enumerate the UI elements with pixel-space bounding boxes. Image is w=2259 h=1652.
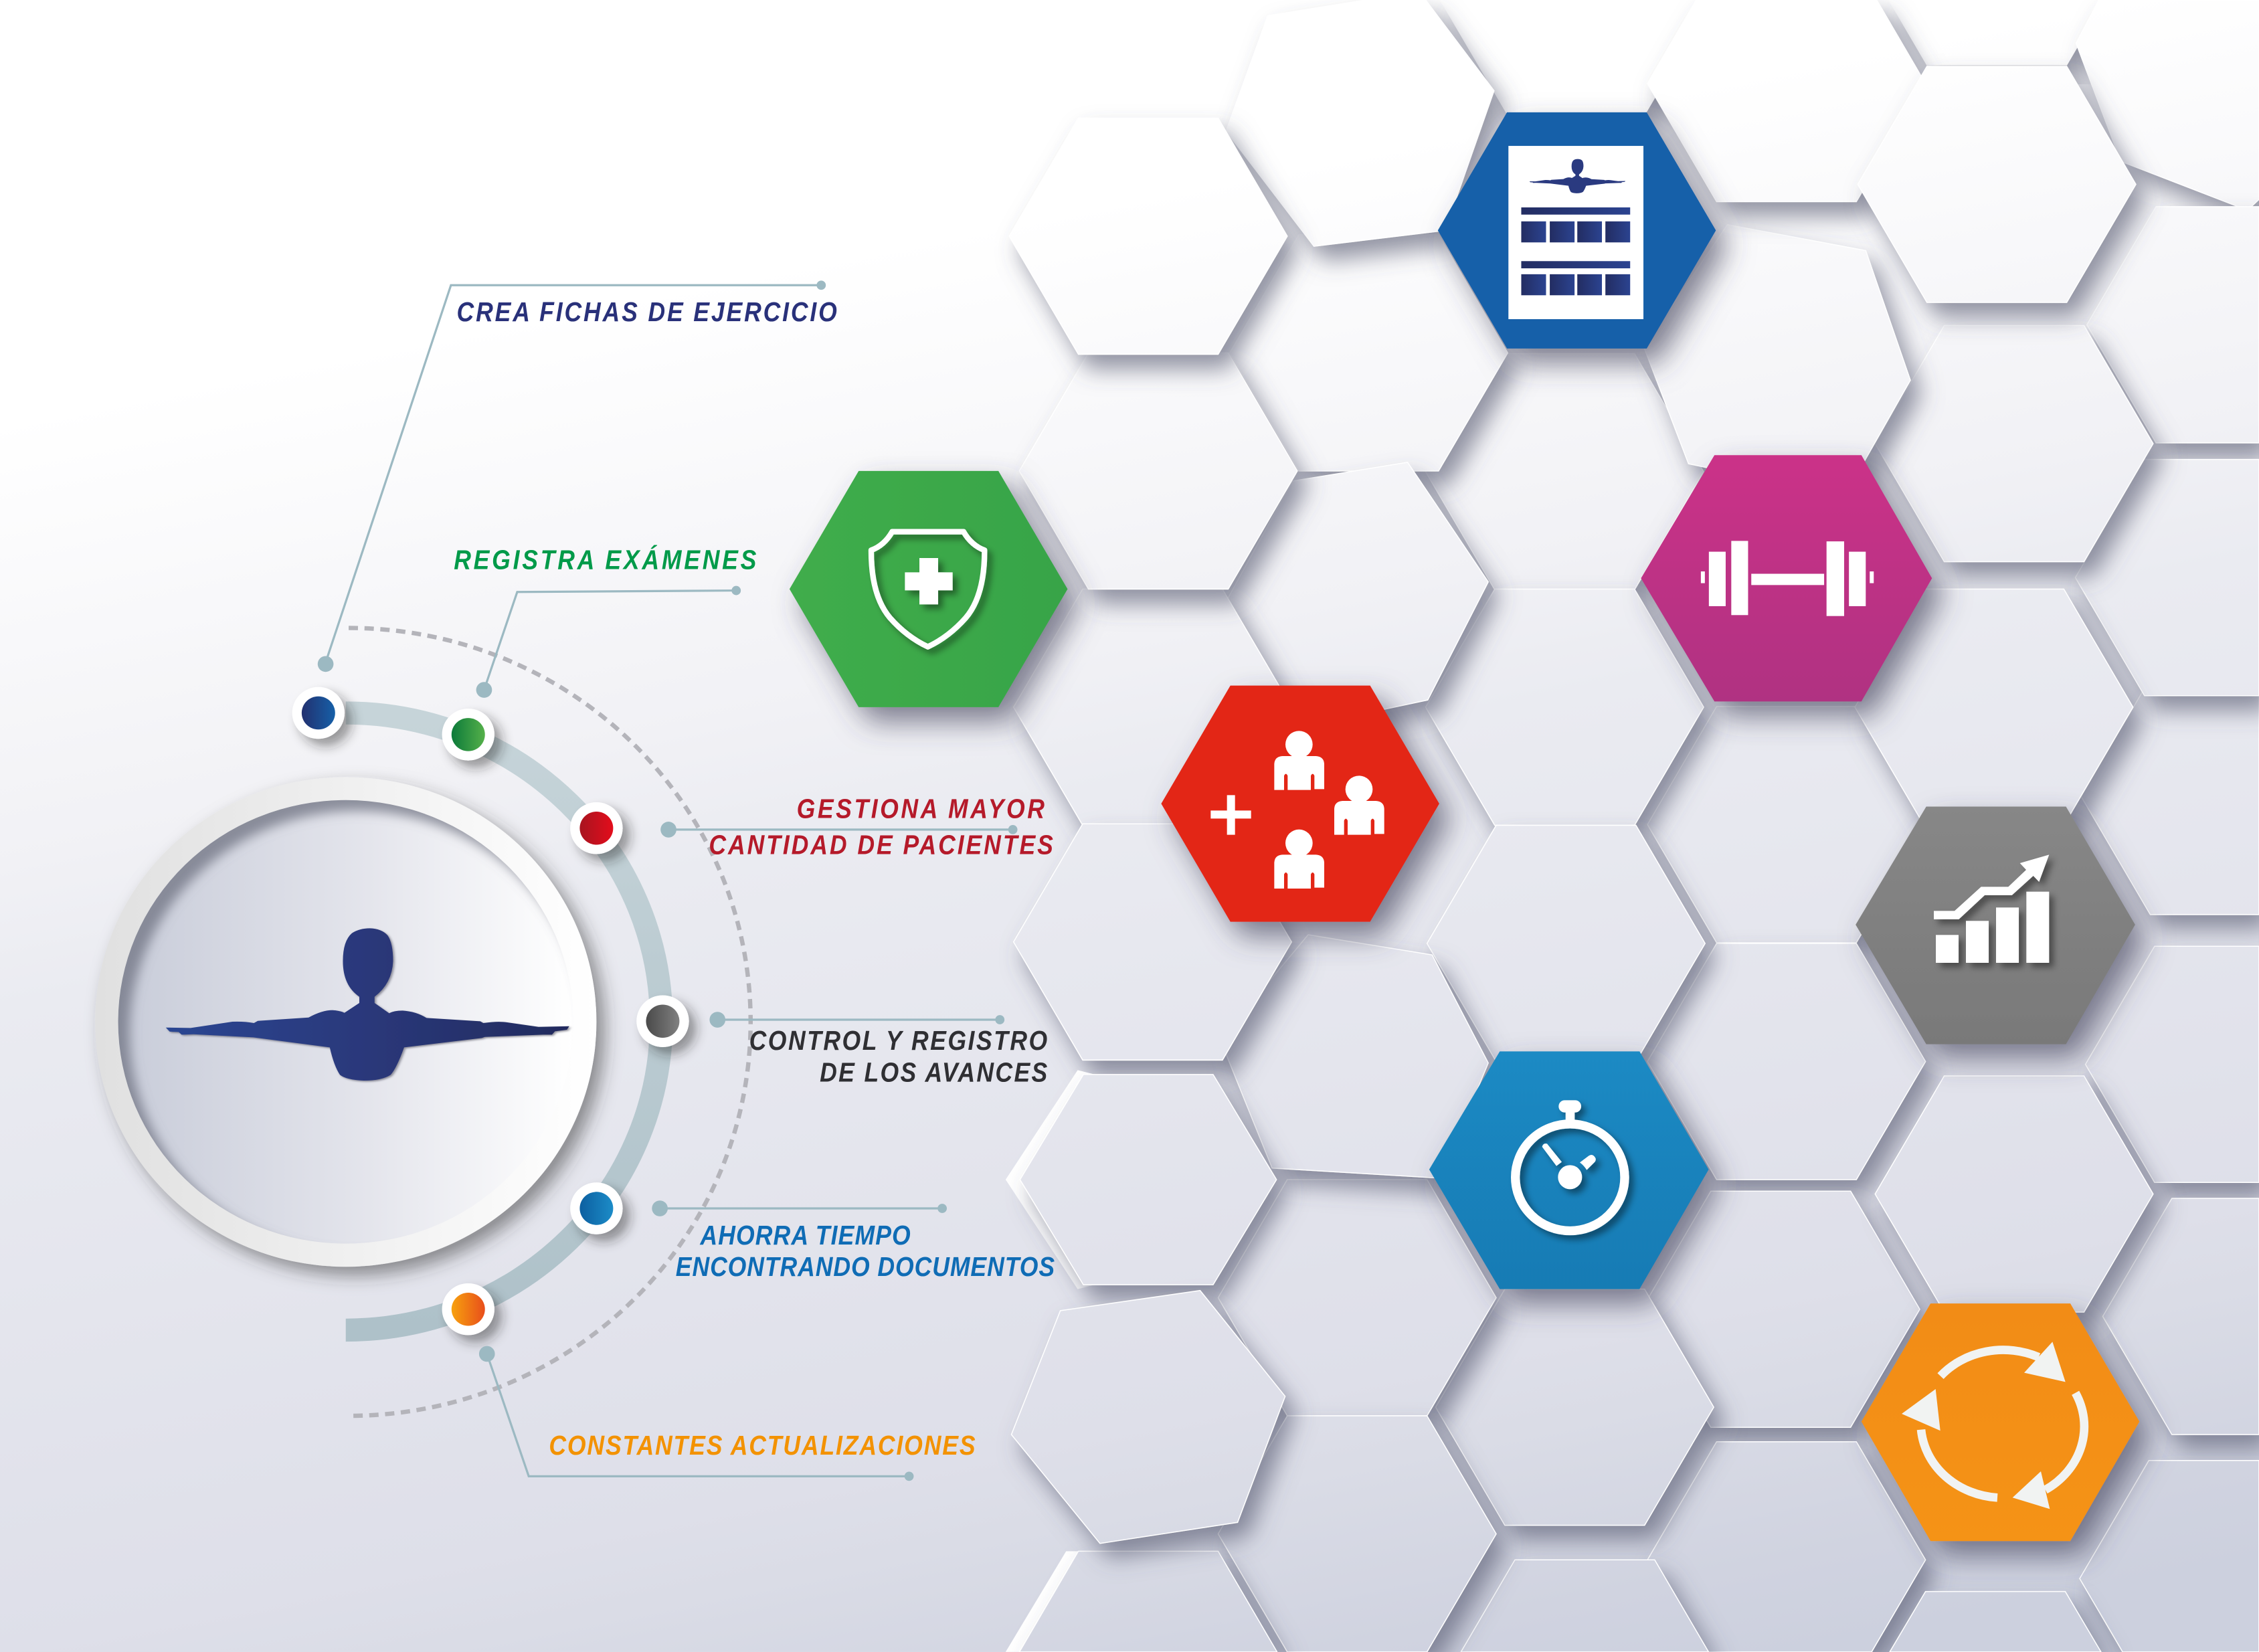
hexagon: patients (red) bbox=[1161, 686, 1439, 922]
hexagon: exercise / dumbbell (magenta) bbox=[1641, 455, 1932, 701]
label: ahorra tiempo encontrando documentos: ENCONTRANDO DOCUMENTOS bbox=[676, 1252, 1055, 1283]
timeline node: exercise sheets bbox=[292, 687, 345, 739]
label: ahorra tiempo encontrando documentos bbox=[676, 1220, 1055, 1283]
hexagon: updates (orange) bbox=[1862, 1303, 2139, 1541]
central medallion with figure bbox=[95, 777, 598, 1267]
hexagon: progress (grey) bbox=[1856, 806, 2135, 1044]
honeycomb background of neutral hexagons bbox=[1006, 0, 2259, 1652]
icon: stopwatch bbox=[1516, 1100, 1625, 1230]
label: crea fichas: CREA FICHAS DE EJERCICIO bbox=[457, 297, 837, 328]
label: control y registro de los avances: CONTROL Y REGISTRO bbox=[749, 1026, 1047, 1057]
timeline node: time saving bbox=[570, 1182, 623, 1234]
figure with outstretched arms bbox=[166, 928, 569, 1081]
icon: growth chart with arrow bbox=[1934, 854, 2049, 963]
icon: exercise sheet document bbox=[1508, 146, 1643, 319]
timeline node: patients bbox=[570, 802, 623, 854]
label: registra examenes: REGISTRA EXÁMENES bbox=[454, 544, 757, 575]
icon: shield with cross bbox=[871, 532, 984, 647]
timeline node: progress bbox=[636, 995, 689, 1047]
label: control y registro de los avances: DE LOS AVANCES bbox=[820, 1057, 1048, 1088]
label: gestiona mayor cantidad de pacientes bbox=[709, 794, 1053, 860]
medallion inner disc bbox=[118, 800, 565, 1243]
hexagon: medical shield (green) bbox=[790, 471, 1067, 707]
timeline node: exams bbox=[442, 709, 494, 761]
icon: circular refresh arrows bbox=[1902, 1342, 2084, 1509]
label: gestiona mayor cantidad de pacientes: CANTIDAD DE PACIENTES bbox=[709, 830, 1053, 860]
timeline node: updates bbox=[442, 1283, 494, 1335]
label: ahorra tiempo encontrando documentos: AHORRA TIEMPO bbox=[699, 1220, 911, 1251]
medallion outer ring bbox=[95, 777, 596, 1267]
leader lines with end dots bbox=[318, 280, 1018, 1481]
label: control y registro de los avances bbox=[749, 1026, 1048, 1088]
label: gestiona mayor cantidad de pacientes: GESTIONA MAYOR bbox=[797, 794, 1045, 824]
icon: group of patients with plus bbox=[1210, 731, 1384, 889]
dashed orbit arc bbox=[349, 628, 751, 1416]
icon: dumbbell bbox=[1701, 541, 1874, 616]
label: constantes actualizaciones: CONSTANTES ACTUALIZACIONES bbox=[549, 1431, 976, 1461]
solid timeline arc bbox=[346, 713, 661, 1330]
hexagon: time saving (steel blue) bbox=[1429, 1051, 1709, 1289]
hexagon: exercise sheet (blue) bbox=[1438, 112, 1716, 349]
